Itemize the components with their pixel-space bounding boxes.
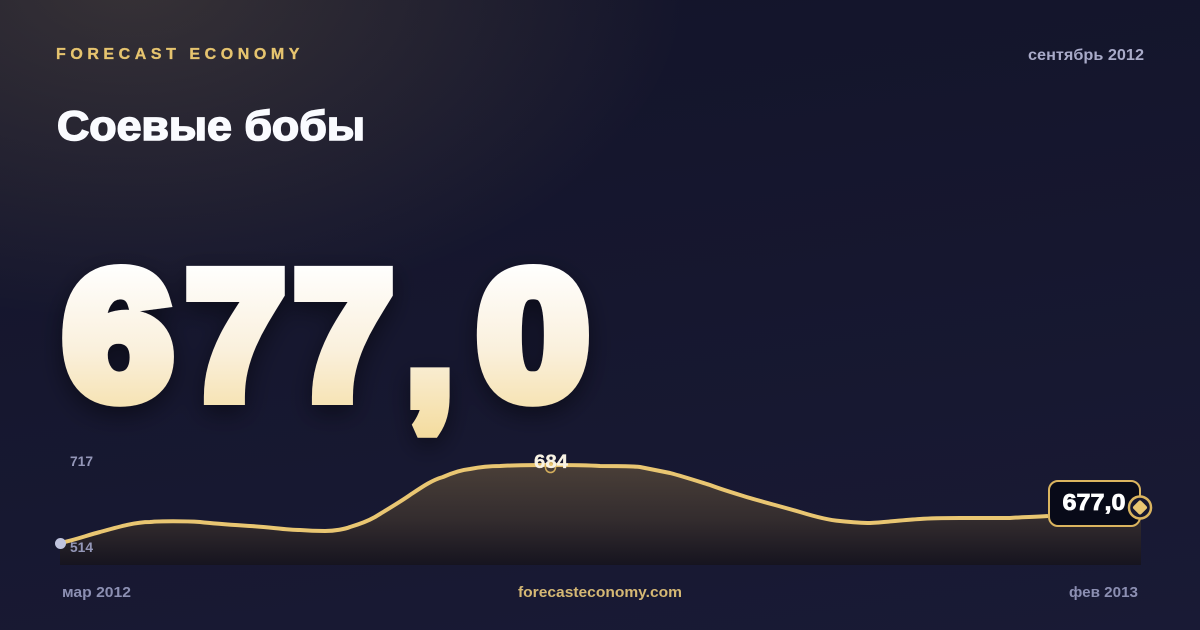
big value: ,: [406, 240, 453, 440]
title: Соевые бобы: [57, 102, 365, 149]
axis min label: 514: [70, 540, 93, 555]
axis max label: 717: [70, 454, 93, 469]
price line: [60, 465, 1048, 543]
current value callout: [1049, 481, 1140, 526]
big value: 6: [64, 235, 172, 435]
current value callout: 677,0: [1062, 489, 1126, 515]
line chart: [55, 452, 1151, 565]
date label: сентябрь 2012: [1028, 47, 1144, 64]
area fill: [60, 465, 1141, 565]
peak label: 684: [534, 452, 568, 473]
big value: 7: [295, 235, 393, 435]
start point: [55, 538, 66, 549]
start date: мар 2012: [62, 584, 131, 601]
big value: 0: [478, 236, 588, 436]
end date: фев 2013: [1069, 584, 1138, 601]
big value: [64, 235, 588, 440]
big value: 7: [187, 235, 285, 435]
current point: [1129, 496, 1151, 518]
brand label: FORECAST ECONOMY: [56, 46, 304, 63]
peak marker: [546, 462, 556, 472]
site link: forecasteconomy.com: [518, 584, 682, 601]
